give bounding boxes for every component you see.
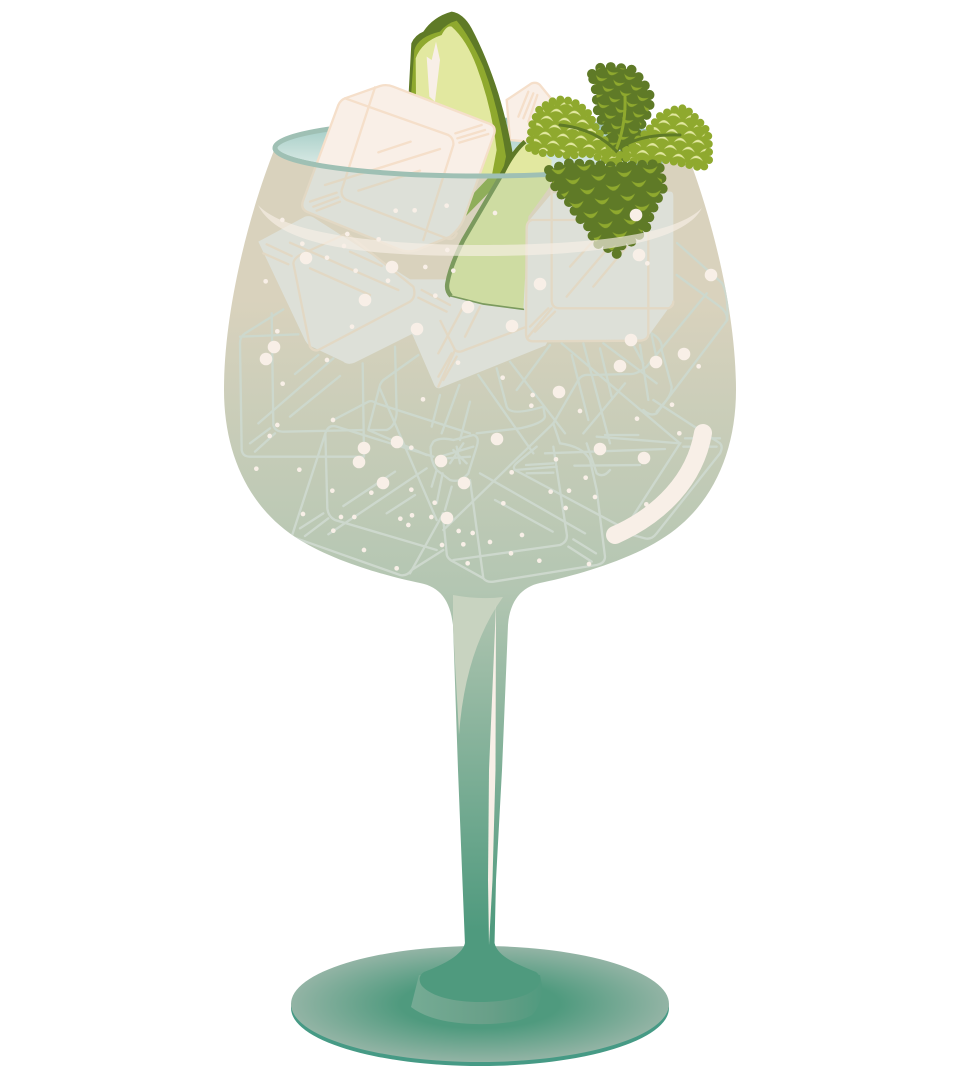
stem base flare bbox=[420, 935, 540, 1002]
mint leaf left bbox=[529, 99, 627, 168]
back ice cube top bbox=[507, 83, 555, 143]
glass foot bbox=[291, 946, 669, 1066]
left ice cube inside glass bbox=[258, 216, 453, 364]
cucumber slice front above rim bbox=[447, 142, 552, 310]
stem light reflection bbox=[453, 595, 503, 735]
mint sprig bbox=[529, 67, 709, 254]
bubbles large bbox=[260, 209, 717, 524]
stem highlight line bbox=[488, 605, 496, 945]
glass reflection band bbox=[258, 205, 702, 256]
mint leaf right bbox=[620, 108, 709, 168]
rim front bbox=[275, 148, 685, 176]
cucumber tail inside glass bbox=[466, 178, 497, 216]
ice and cucumber inside glass bbox=[239, 168, 728, 583]
rim interior back bbox=[275, 120, 685, 176]
mint leaf top bbox=[592, 67, 651, 150]
glass shine arc bbox=[615, 433, 703, 535]
middle ice cube inside glass bbox=[410, 280, 547, 388]
illustration: cocktail glass bbox=[224, 12, 736, 1066]
mint leaf front bbox=[549, 163, 663, 254]
cucumber slice front below rim bbox=[444, 177, 550, 310]
glass bowl and stem bbox=[224, 148, 736, 945]
ice cube below rim bbox=[302, 168, 479, 250]
right ice cube inside glass bbox=[526, 187, 673, 341]
cucumber highlight bbox=[427, 42, 440, 102]
wireframe ice cubes in lower glass bbox=[240, 243, 727, 582]
cucumber slice back bbox=[409, 12, 513, 177]
foot collar highlight bbox=[411, 975, 542, 1024]
ice cube above rim bbox=[302, 85, 495, 251]
bubbles small bbox=[254, 203, 701, 571]
